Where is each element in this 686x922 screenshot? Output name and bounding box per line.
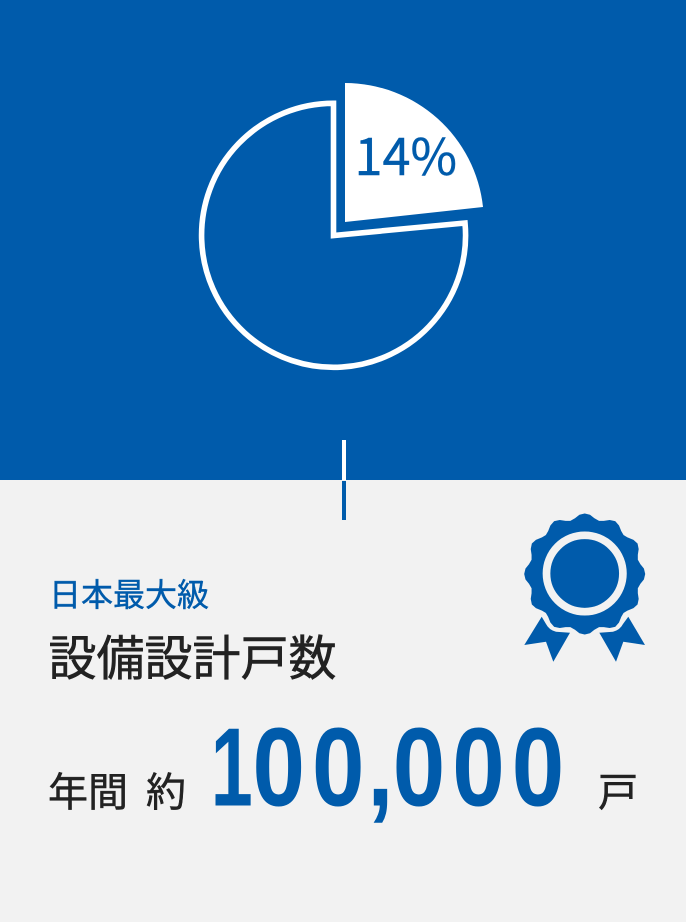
heading: blue subtitle: 日本最大級 [49,577,209,613]
big number: 1 [211,706,253,830]
icon: award rosette [524,514,645,662]
label: annual: 年間 [48,771,128,815]
pie highlighted wedge [345,83,483,222]
connector line [342,440,346,520]
label: approximately: 約 [146,771,186,815]
heading: main title: 設備設計戸数 [48,633,337,686]
wedge label: 14%: 14% [354,116,457,190]
pie chart [202,83,483,367]
label: units: 戸 [598,771,638,815]
pie remainder outline [202,103,466,367]
panel: blue top section [0,0,686,480]
big number: 00,000 [252,705,564,829]
